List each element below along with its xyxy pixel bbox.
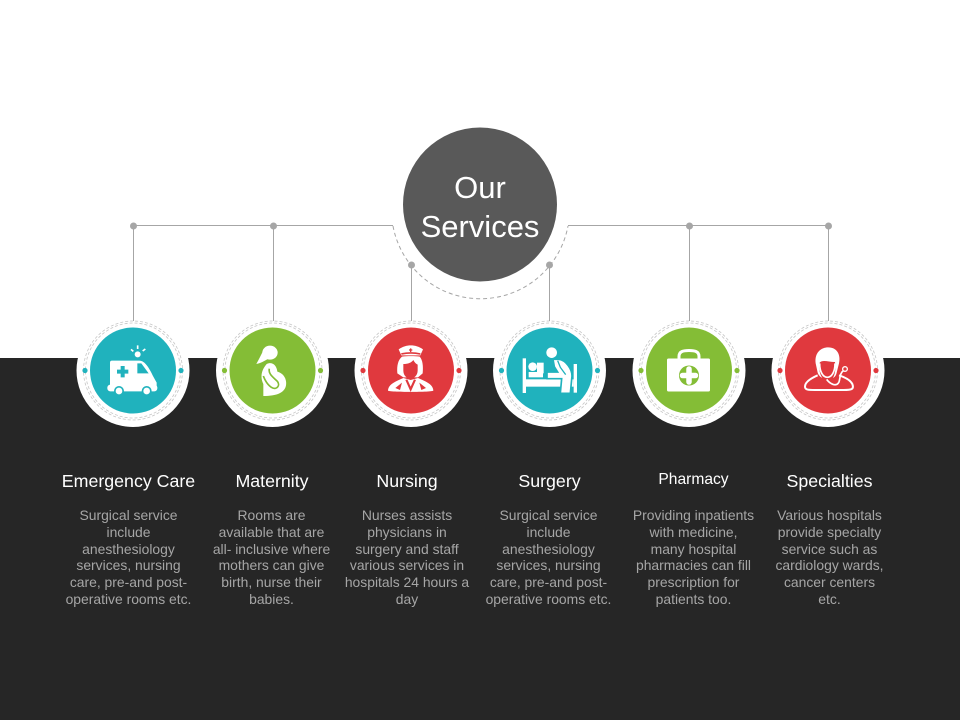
description: services, nursing — [76, 557, 181, 573]
description: Rooms are — [238, 507, 305, 523]
dark lower background — [0, 358, 960, 720]
description: Surgical service — [79, 507, 178, 523]
node: maternity — [216, 314, 329, 427]
column: Nursing — [345, 471, 470, 607]
description: available that are — [219, 524, 324, 540]
icon: doctor with stethoscope — [805, 347, 853, 390]
column: Maternity — [213, 471, 330, 607]
connector dots — [130, 222, 832, 268]
node: nursing — [354, 314, 468, 427]
description — [345, 507, 470, 607]
description: babies. — [249, 591, 294, 607]
node: surgery — [493, 314, 606, 427]
column: Pharmacy — [633, 471, 754, 607]
description — [775, 507, 884, 607]
description: prescription for — [648, 574, 739, 590]
description: Providing inpatients — [633, 507, 754, 523]
heading: Specialties — [786, 471, 872, 491]
description: include — [106, 524, 151, 540]
description: anesthesiology — [82, 541, 175, 557]
description: care, pre-and post- — [70, 574, 187, 590]
description — [633, 507, 754, 607]
description: anesthesiology — [502, 541, 595, 557]
column: Surgery — [486, 471, 611, 607]
description: mothers can give — [219, 557, 324, 573]
icon: patient in bed — [523, 347, 577, 393]
heading: Surgery — [518, 471, 581, 491]
description: surgery and staff — [355, 541, 459, 557]
description: service such as — [782, 541, 877, 557]
hub circle: Our Services: Our — [454, 170, 506, 205]
description — [213, 507, 330, 607]
description: include — [526, 524, 571, 540]
node: pharmacy — [632, 314, 746, 427]
connector lines — [134, 226, 828, 321]
description: care, pre-and post- — [490, 574, 607, 590]
description: pharmacies can fill — [636, 557, 751, 573]
node: emergency care — [76, 314, 190, 427]
description: etc. — [818, 591, 841, 607]
heading: Emergency Care — [62, 471, 195, 491]
description: operative rooms etc. — [486, 591, 611, 607]
hub circle: Our Services: Services — [421, 209, 539, 244]
description: various services in — [350, 557, 464, 573]
description: Various hospitals — [777, 507, 882, 523]
column: Emergency Care — [62, 471, 195, 607]
icon: ambulance — [107, 345, 157, 396]
description: day — [396, 591, 418, 607]
heading: Nursing — [376, 471, 438, 491]
icon: pregnant woman — [256, 346, 286, 396]
icon: first aid kit — [667, 350, 710, 392]
hub circle: Our Services — [403, 128, 557, 282]
description — [66, 507, 191, 607]
description: patients too. — [656, 591, 731, 607]
node: specialties — [772, 314, 884, 427]
description: operative rooms etc. — [66, 591, 191, 607]
heading: Pharmacy — [658, 471, 729, 488]
icon: nurse — [388, 345, 433, 392]
description: hospitals 24 hours a — [345, 574, 469, 590]
description: cancer centers — [784, 574, 875, 590]
description: many hospital — [651, 541, 736, 557]
description: all- inclusive where — [213, 541, 330, 557]
description: with medicine, — [649, 524, 738, 540]
description: physicians in — [367, 524, 447, 540]
description — [486, 507, 611, 607]
description: Nurses assists — [362, 507, 452, 523]
heading: Maternity — [235, 471, 309, 491]
description: provide specialty — [778, 524, 881, 540]
description: Surgical service — [499, 507, 598, 523]
column: Specialties — [775, 471, 884, 607]
description: birth, nurse their — [221, 574, 322, 590]
description: cardiology wards, — [775, 557, 884, 573]
description: services, nursing — [496, 557, 601, 573]
